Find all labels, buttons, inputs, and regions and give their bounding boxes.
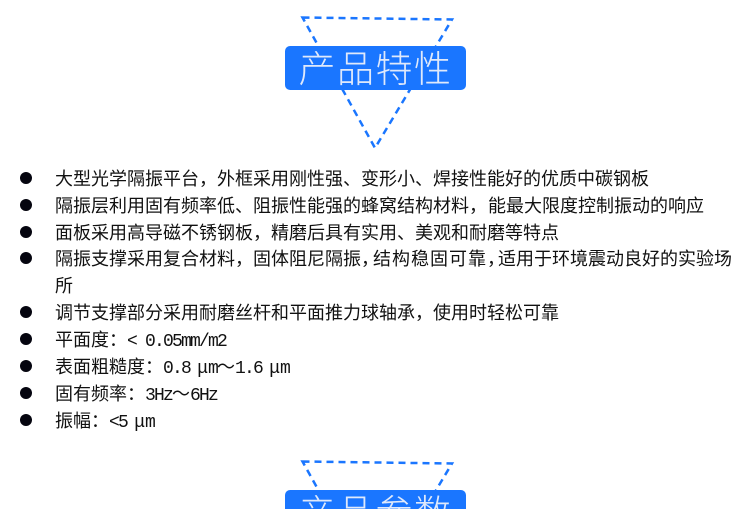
bullet 2: 能最大限度控制振动的响应 <box>488 192 704 218</box>
bullet 4: 固体阻尼隔振， <box>253 245 379 271</box>
bullet 4 <box>20 245 732 298</box>
icon: dashed triangle top <box>300 16 454 148</box>
bullet 1: 大型光学隔振平台，外框采用刚性强、变形小、焊接性能好的优质中碳钢板 <box>55 165 649 191</box>
bullet 4: 适用于环境震动良好的实验场 <box>498 245 732 271</box>
bullet 7: μ <box>197 359 208 379</box>
bullet 7: μ <box>269 359 280 379</box>
bullet 7: 表面粗糙度：0.8 m～1.6 m <box>55 353 289 379</box>
bullet 2: 隔振层利用固有频率低、阻振性能强的蜂窝结构材料， <box>55 192 487 218</box>
bullet 9: 振幅：<5 m <box>55 407 154 433</box>
bullet 3: 面板采用高导磁不锈钢板，精磨后具有实用、美观和耐磨等特点 <box>55 219 559 245</box>
bullet 9: μ <box>134 413 145 433</box>
bullet 2 <box>20 192 704 218</box>
bullet 8: 固有频率：3Hz～6Hz <box>55 380 217 406</box>
bullet 6: 平面度：< 0.05mm/m2 <box>55 326 226 352</box>
icon: dashed triangle bottom <box>300 460 454 490</box>
bullet list <box>20 165 732 433</box>
bullet 4: 所 <box>55 272 73 298</box>
bullet 4: 结构稳固可靠， <box>373 245 506 271</box>
bullet 5: 调节支撑部分采用耐磨丝杆和平面推力球轴承，使用时轻松可靠 <box>55 299 559 325</box>
bullet 4: 隔振支撑采用复合材料， <box>55 245 253 271</box>
